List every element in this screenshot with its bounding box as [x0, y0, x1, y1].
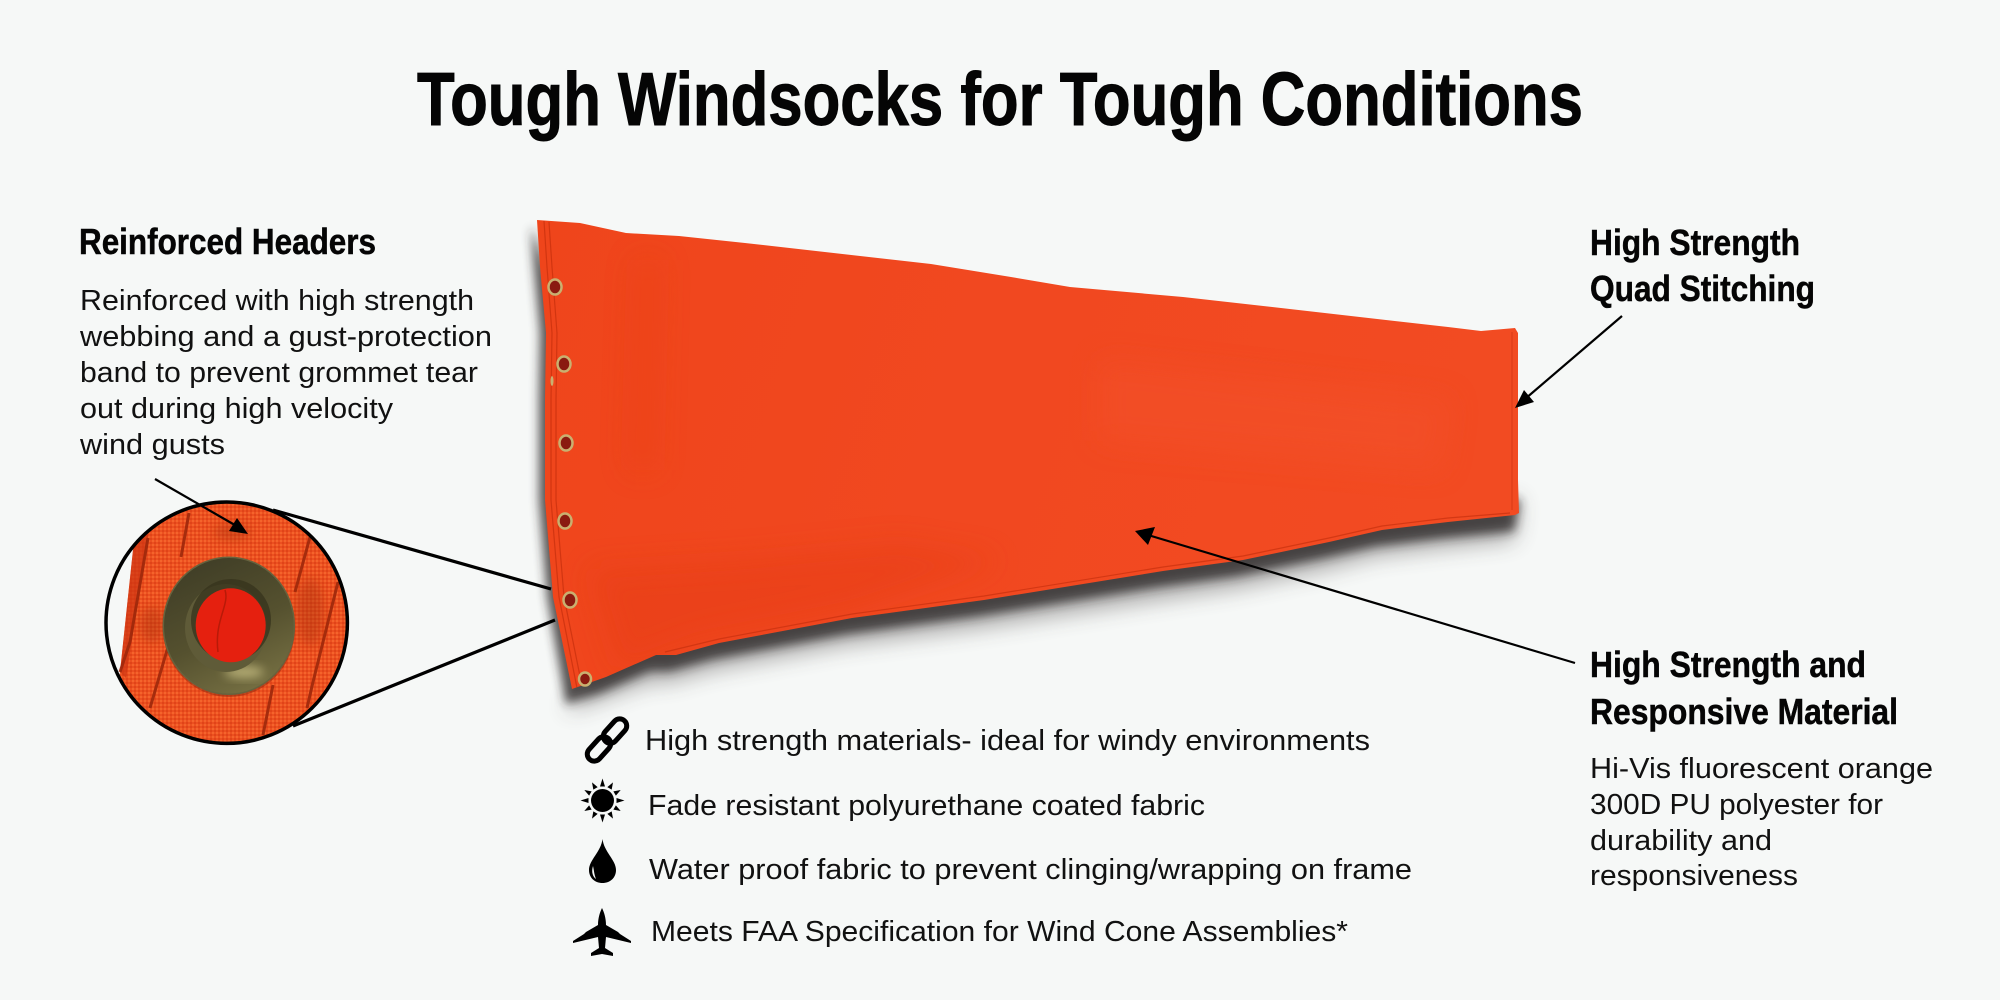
body text: webbing and a gust-protection	[79, 321, 492, 353]
panel: reinforced headers	[79, 221, 492, 461]
feature: FAA specification	[573, 908, 1348, 956]
feature: fade resistant	[580, 778, 1205, 822]
windsock shadow	[531, 226, 1520, 704]
icon: water drop	[589, 839, 616, 883]
arrow: to fabric	[1135, 527, 1575, 663]
heading: High Strength	[1590, 222, 1800, 263]
panel: feature list	[573, 716, 1412, 956]
body text: wind gusts	[79, 429, 225, 461]
grommets	[548, 280, 591, 686]
fabric folds	[544, 221, 1512, 688]
feature: fade resistant: Fade resistant polyurethane coated fabric	[648, 790, 1205, 822]
heading	[1590, 222, 1815, 309]
feature: high strength	[584, 716, 1370, 764]
windsock fabric	[537, 220, 1519, 689]
title: Tough Windsocks for Tough Conditions	[417, 57, 1583, 141]
heading: Responsive Material	[1590, 691, 1898, 732]
feature: FAA specification: Meets FAA Specification for Wind Cone Assemblies*	[651, 916, 1348, 948]
panel: windsock photo	[531, 220, 1520, 712]
lens ring	[106, 502, 347, 743]
feature: water proof: Water proof fabric to prevent clinging/wrapping on frame	[649, 854, 1412, 886]
heading: Reinforced Headers	[79, 221, 376, 262]
arrow: to grommet close-up	[155, 479, 248, 534]
body text: responsiveness	[1590, 860, 1798, 892]
body text: out during high velocity	[80, 393, 394, 425]
windsock soft shadow	[566, 500, 1520, 712]
body text	[1590, 753, 1933, 892]
body text: durability and	[1590, 825, 1772, 857]
body text: 300D PU polyester for	[1590, 789, 1884, 821]
icon: chain link	[584, 716, 630, 764]
body text	[79, 285, 492, 461]
zoom lines to grommet	[273, 510, 555, 726]
icon: sun	[580, 778, 624, 822]
heading	[1590, 644, 1898, 732]
fabric swatch	[118, 504, 346, 742]
panel: quad stitching	[1515, 222, 1815, 408]
header stitching	[544, 221, 1512, 688]
feature: high strength: High strength materials- ideal for windy environments	[645, 725, 1370, 757]
panel: material	[1135, 527, 1933, 892]
body text: Reinforced with high strength	[80, 285, 474, 317]
feature: water proof	[589, 839, 1412, 886]
brass grommet	[163, 557, 295, 697]
grommet fragment	[550, 376, 554, 386]
body text: Hi-Vis fluorescent orange	[1590, 753, 1933, 785]
body text: band to prevent grommet tear	[80, 357, 479, 389]
heading: Quad Stitching	[1590, 268, 1815, 309]
heading: High Strength and	[1590, 644, 1866, 685]
panel: grommet close-up	[104, 500, 350, 746]
arrow: to stitching	[1515, 316, 1622, 408]
icon: airplane	[573, 908, 631, 956]
